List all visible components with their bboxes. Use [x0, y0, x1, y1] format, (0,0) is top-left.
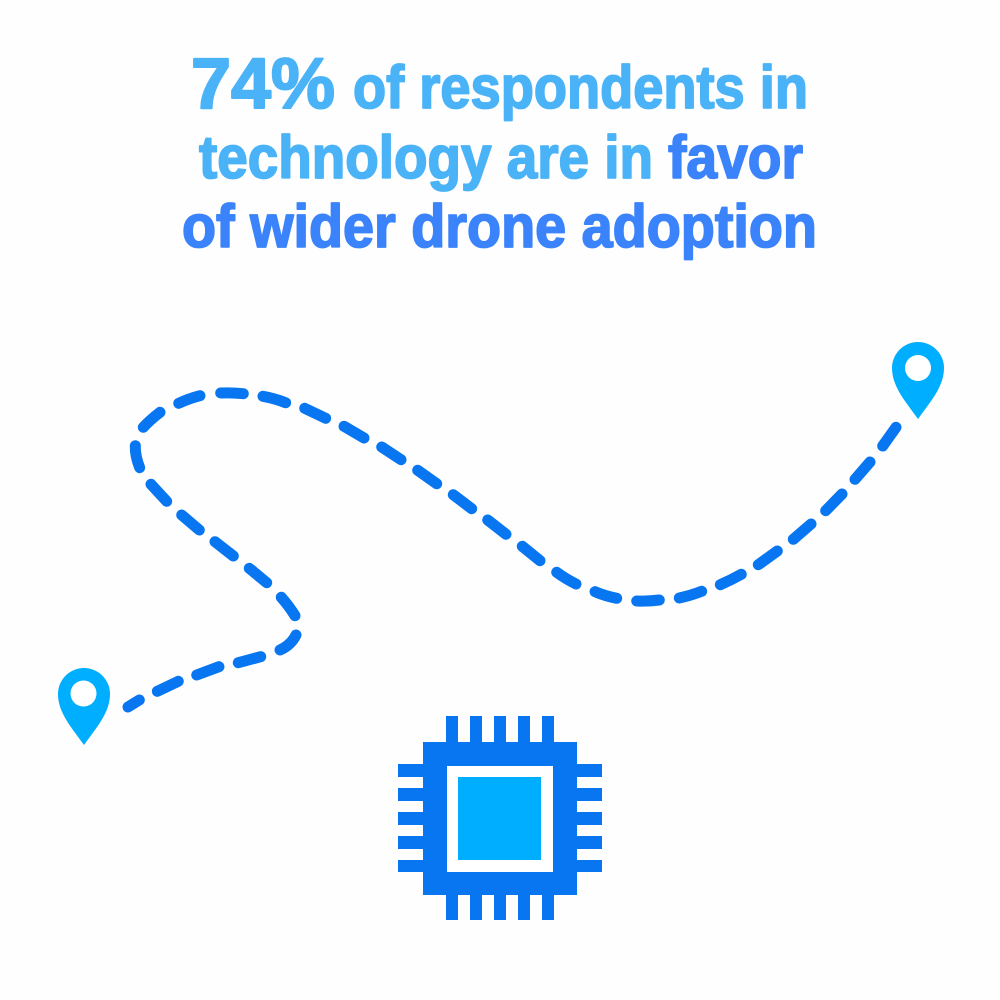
- dashed flight route: [128, 393, 896, 707]
- chip white inset: [447, 766, 553, 872]
- chip pins and body: [398, 716, 602, 920]
- title line 1: statistic: 74%: [191, 45, 335, 124]
- title: [182, 45, 817, 260]
- title line 1: remainder: of respondents in: [353, 54, 808, 121]
- title line 2: favor: favor: [668, 124, 803, 191]
- icon: microchip: [398, 716, 602, 920]
- chip core: [458, 777, 541, 860]
- icon: start location pin: [58, 668, 110, 745]
- icon: end location pin: [892, 342, 944, 419]
- title line 3: of wider drone adoption: [182, 193, 817, 260]
- title line 2: light part: technology are in: [199, 124, 653, 191]
